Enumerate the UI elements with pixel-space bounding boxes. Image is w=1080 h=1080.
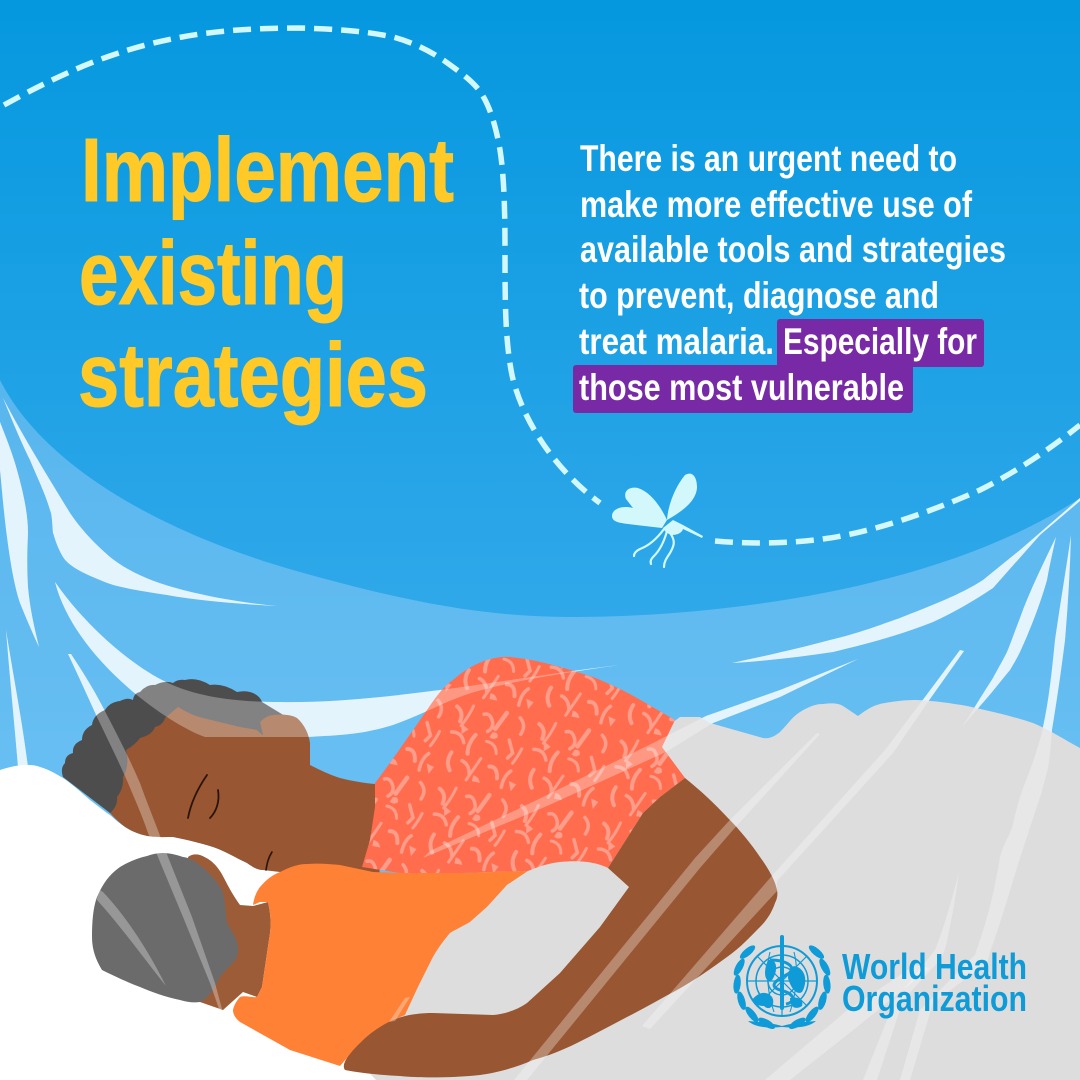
body paragraph: treat malaria. [579, 321, 774, 362]
body paragraph: make more effective use of [580, 184, 973, 225]
hair: mother [62, 679, 285, 820]
logo: World Health Organization [732, 937, 1027, 1031]
wordmark [842, 946, 1027, 1019]
body paragraph: those most vulnerable [579, 367, 904, 408]
title [78, 121, 454, 426]
wordmark: Organization [842, 978, 1027, 1019]
title: existing [79, 224, 347, 324]
highlight: especially for [777, 319, 984, 367]
hair: child [92, 853, 238, 1002]
coral patterned shirt [360, 655, 690, 875]
highlight: those most vulnerable [573, 365, 913, 413]
wordmark: World Health [842, 946, 1027, 987]
title: Implement [81, 121, 454, 221]
body paragraph [573, 138, 1006, 413]
sleeping child [92, 853, 528, 1066]
net folds seen over the sleepers [0, 398, 1080, 1080]
face and neck: mother [110, 707, 380, 880]
net highlight folds [0, 398, 1080, 1080]
sleeping mother [62, 655, 690, 880]
dashed path continuation [715, 425, 1080, 543]
mother's arm [344, 778, 777, 1077]
grey blanket [340, 700, 1080, 1080]
face and neck: child [188, 854, 271, 1010]
emblem: globe, staff and wreath [732, 937, 832, 1031]
title: strategies [78, 326, 428, 426]
dashed mosquito flight path [4, 28, 600, 503]
body paragraph: There is an urgent need to [580, 138, 957, 179]
icon: mosquito [612, 474, 703, 567]
body paragraph: Especially for [783, 321, 977, 362]
mosquito net canopy [0, 380, 1080, 1080]
body paragraph: to prevent, diagnose and [579, 275, 939, 316]
closed eye and nose lines [188, 775, 272, 870]
white pillow [0, 765, 376, 1080]
orange shirt [233, 864, 528, 1066]
grey sheet between the arm and shirt [405, 861, 629, 1015]
